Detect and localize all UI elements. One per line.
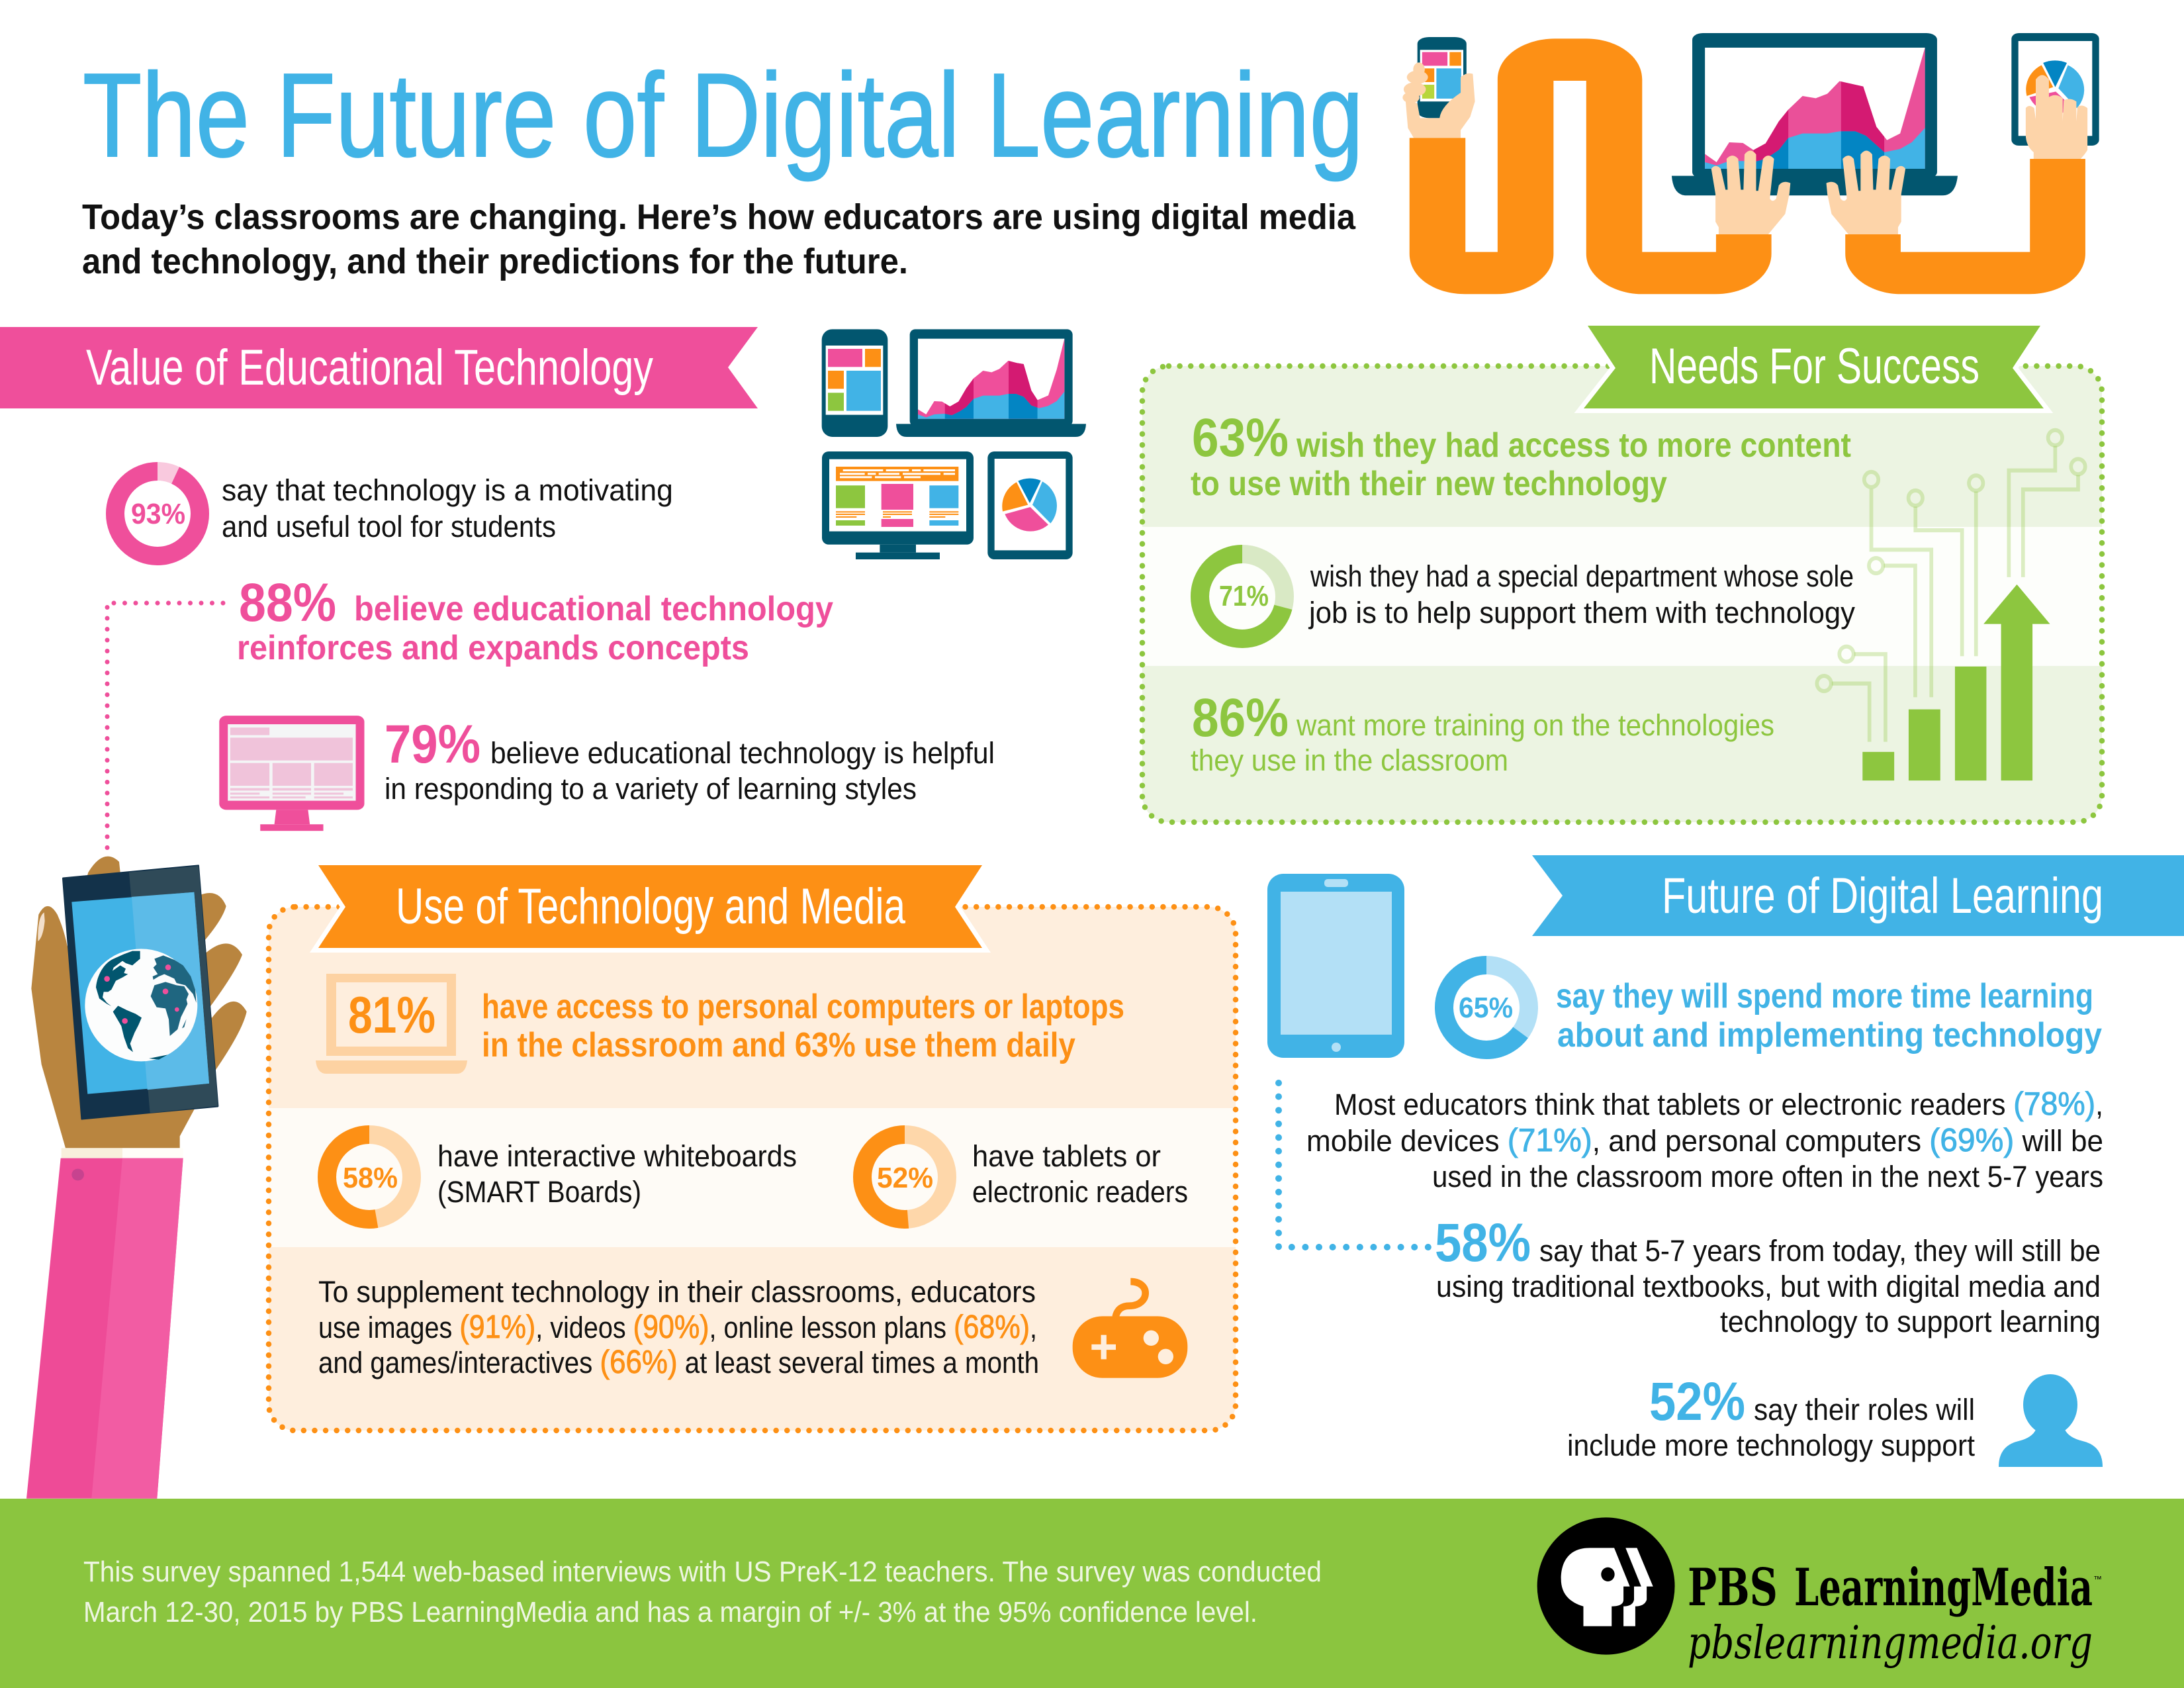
donut: 65%: 65% xyxy=(1459,992,1513,1024)
text: whiteboards xyxy=(437,1139,797,1209)
logo: PBS LearningMedia wordmark: ™ xyxy=(2093,1574,2102,1584)
text: 71% statement: job is to help support them with technology xyxy=(1308,596,1855,630)
text: more time learning: say they will spend more time learning xyxy=(1556,977,2093,1015)
text: supplement paragraph: and games/interactives (66%) at least several times a month xyxy=(318,1344,1039,1380)
banner: use of technology and media: Use of Technology and Media xyxy=(396,878,906,935)
icon: globe on phone screen xyxy=(85,949,197,1061)
text: 93% statement: say that technology is a motivating xyxy=(222,473,673,507)
stat: 58% xyxy=(1435,1213,2101,1338)
panel: use of technology and media xyxy=(269,865,1236,1430)
panel: needs for success xyxy=(1142,326,2102,822)
text: supplement paragraph xyxy=(318,1275,1039,1380)
donut: 93% xyxy=(115,471,200,556)
stat: 52%: include more technology support xyxy=(1567,1429,1975,1462)
intro text xyxy=(82,197,1356,281)
banner: value of educational technology: Value of Educational Technology xyxy=(86,340,653,396)
panel: footer xyxy=(0,1499,2184,1688)
stat: 86%: 86% xyxy=(1192,688,1289,748)
icon: hands on keyboard xyxy=(1711,150,1905,234)
donut: 58% xyxy=(327,1135,412,1219)
stat: 88%: reinforces and expands concepts xyxy=(237,629,749,667)
intro text: and technology, and their predictions for the future. xyxy=(82,242,908,281)
text: tablets and devices paragraph: used in the classroom more often in the next 5-7 years xyxy=(1432,1160,2103,1194)
panel background xyxy=(1142,366,2102,822)
connector: blue dotted line xyxy=(1279,1083,1430,1247)
icon: game controller xyxy=(1073,1282,1187,1378)
donut: 93%: 93% xyxy=(131,498,185,530)
stat: 52%: say their roles will xyxy=(1754,1393,1975,1427)
text: whiteboards: have interactive whiteboards xyxy=(437,1139,797,1173)
text: personal computers: in the classroom and 63% use them daily xyxy=(482,1026,1075,1064)
icon: orange winding sleeve xyxy=(1410,38,2085,294)
stat: 63% xyxy=(1191,408,1851,503)
logo: PBS LearningMedia wordmark: pbslearningmedia.org xyxy=(1688,1617,2093,1669)
stat: 86% xyxy=(1191,688,1774,777)
text: more time learning xyxy=(1556,977,2102,1055)
icon: device group xyxy=(822,329,1086,559)
text: survey note: March 12-30, 2015 by PBS LearningMedia and has a margin of +/- 3% at the 95% confidence level. xyxy=(83,1596,1257,1628)
intro text: Today’s classrooms are changing. Here’s how educators are using digital media xyxy=(82,197,1356,237)
stat: 58%: using traditional textbooks, but with digital media and xyxy=(1436,1270,2101,1303)
stat: 63%: wish they had access to more content xyxy=(1296,426,1851,465)
logo: PBS heads xyxy=(1537,1517,1675,1655)
stat: 52%: 52% xyxy=(1649,1372,1745,1432)
stat: 79%: believe educational technology is helpful xyxy=(490,736,995,770)
chart: rising bars with circuit lines xyxy=(1817,430,2085,780)
stat: 58%: technology to support learning xyxy=(1720,1305,2101,1338)
stat: 86%: they use in the classroom xyxy=(1191,743,1508,777)
title: The Future of Digital Learning xyxy=(83,49,1363,182)
donut: 52%: 52% xyxy=(877,1162,933,1194)
icon: pink monitor xyxy=(219,716,365,831)
text: tablets and devices paragraph xyxy=(1306,1086,2103,1194)
panel: value of educational technology xyxy=(0,327,1086,854)
icon: phone held in hand xyxy=(1402,37,1475,138)
text: more time learning: about and implementing technology xyxy=(1557,1016,2102,1055)
banner: use of technology and media xyxy=(318,865,982,948)
donut: 58%: 58% xyxy=(343,1162,398,1194)
icon: pale laptop with 81%: 81% xyxy=(348,986,435,1044)
stat: 63%: 63% xyxy=(1192,408,1289,468)
text: tablets and devices paragraph: Most educators think that tablets or electronic readers (78%), xyxy=(1334,1086,2103,1122)
stat: 79%: 79% xyxy=(385,714,480,774)
text: 71% statement: wish they had a special department whose sole xyxy=(1310,559,1854,593)
text: 71% statement xyxy=(1308,559,1855,630)
stat: 79% xyxy=(385,714,995,806)
donut: 52% xyxy=(862,1135,947,1219)
text: supplement paragraph: To supplement technology in their classrooms, educators xyxy=(318,1275,1036,1309)
logo: PBS LearningMedia wordmark xyxy=(1688,1558,2102,1669)
text: personal computers: have access to personal computers or laptops xyxy=(482,988,1124,1026)
donut: 71%: 71% xyxy=(1219,580,1269,612)
banner: future of digital learning xyxy=(1532,855,2184,936)
icon: tablet with pie chart xyxy=(2011,33,2099,159)
banner: needs for success xyxy=(1584,326,2044,408)
donut: 65% xyxy=(1444,965,1529,1050)
stat: 88%: believe educational technology xyxy=(354,590,833,628)
text: survey note: This survey spanned 1,544 web-based interviews with US PreK-12 teachers. The survey was conducted xyxy=(83,1556,1322,1588)
text: tablets xyxy=(972,1139,1188,1209)
stat: 79%: in responding to a variety of learning styles xyxy=(385,772,917,806)
panel: future of digital learning xyxy=(1267,855,2184,1467)
icon: laptop with area chart xyxy=(1672,33,1958,195)
icon: pale laptop with 81% xyxy=(316,974,467,1074)
text: tablets: have tablets or xyxy=(972,1139,1161,1173)
connector: pink dotted line xyxy=(107,603,223,854)
text: supplement paragraph: use images (91%), videos (90%), online lesson plans (68%), xyxy=(318,1309,1037,1345)
banner: value of educational technology xyxy=(0,327,758,408)
logo: PBS LearningMedia wordmark: PBS xyxy=(1688,1558,1778,1618)
text: tablets: electronic readers xyxy=(972,1175,1188,1209)
text: tablets and devices paragraph: mobile devices (71%), and personal computers (69%) will be xyxy=(1306,1123,2103,1158)
text: whiteboards: (SMART Boards) xyxy=(437,1175,641,1209)
icon: blue tablet xyxy=(1267,874,1404,1058)
header illustration: arms and devices xyxy=(1402,33,2099,294)
stat: 58%: say that 5-7 years from today, they will still be xyxy=(1539,1234,2101,1268)
text: 93% statement: and useful tool for students xyxy=(222,510,556,543)
stat: 63%: to use with their new technology xyxy=(1191,465,1667,503)
stat: 86%: want more training on the technologies xyxy=(1296,708,1774,742)
banner: needs for success: Needs For Success xyxy=(1649,338,1979,395)
text: personal computers xyxy=(482,988,1124,1064)
stat: 58%: 58% xyxy=(1435,1213,1531,1273)
text: survey note xyxy=(83,1556,1322,1628)
donut: 71% xyxy=(1200,554,1285,639)
stat: 88% xyxy=(237,573,833,667)
icon: person xyxy=(1999,1374,2103,1467)
icon: hand holding phone xyxy=(26,857,247,1499)
text: 93% statement xyxy=(222,473,673,543)
stat: 52% xyxy=(1567,1372,1975,1462)
panel background xyxy=(269,907,1236,1430)
stat: 88%: 88% xyxy=(239,573,336,633)
